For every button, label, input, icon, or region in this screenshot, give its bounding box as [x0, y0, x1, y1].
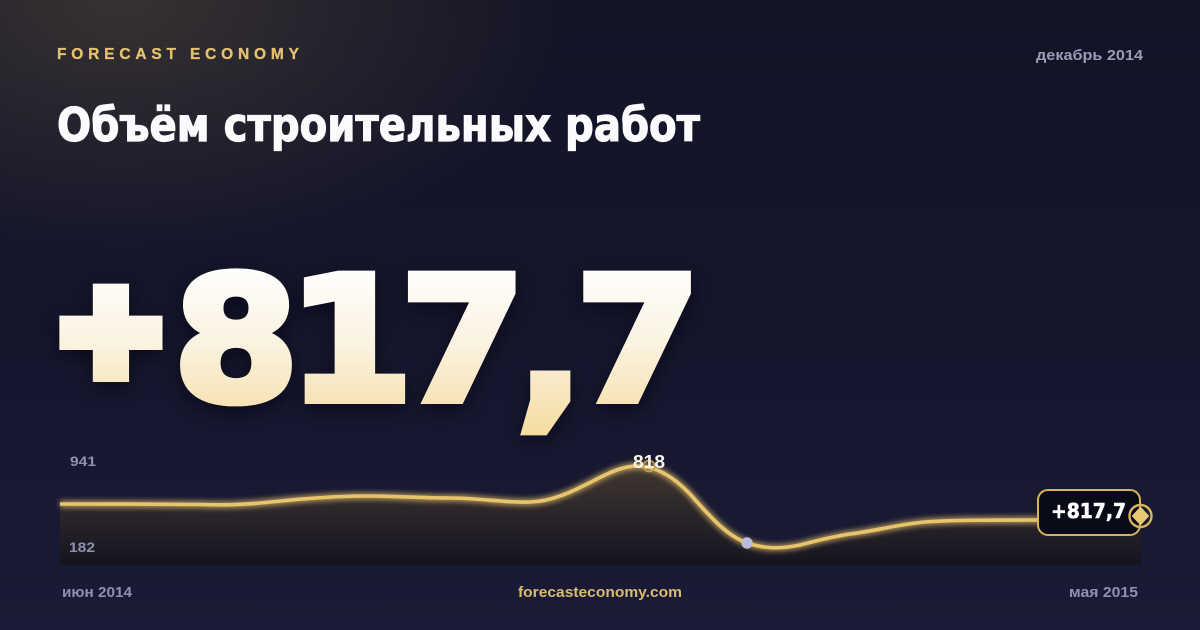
- big value: [56, 240, 701, 454]
- big value: 7: [575, 240, 701, 441]
- big value: ,: [516, 247, 585, 448]
- end point marker: [1130, 505, 1152, 527]
- big value: 8: [173, 240, 299, 441]
- big value: ,: [516, 253, 585, 454]
- chart line glow: [60, 466, 1040, 548]
- start date: июн 2014: [62, 585, 132, 601]
- big value: 1: [288, 240, 413, 441]
- chart line: [60, 466, 1040, 548]
- axis min label: 182: [69, 539, 95, 555]
- big value: 1: [288, 246, 413, 447]
- end date: мая 2015: [1069, 585, 1138, 601]
- peak marker: [644, 460, 654, 472]
- big value: 8: [173, 246, 299, 447]
- peak label: 818: [633, 452, 665, 472]
- chart: [60, 452, 1152, 565]
- big value: +: [56, 257, 166, 402]
- date label: декабрь 2014: [1036, 47, 1144, 64]
- chart area fill: [60, 466, 1141, 565]
- big value: +: [56, 263, 166, 408]
- low point marker: [741, 537, 753, 549]
- title: Объём строительных работ: [57, 98, 700, 152]
- big value: 7: [400, 240, 526, 441]
- big value: 7: [575, 246, 701, 447]
- current value badge: +817,7: [1051, 499, 1126, 523]
- axis max label: 941: [70, 453, 96, 469]
- brand label: FORECAST ECONOMY: [57, 46, 300, 63]
- current value badge: [1038, 490, 1140, 535]
- big value: 7: [400, 246, 526, 447]
- website: forecasteconomy.com: [518, 585, 682, 601]
